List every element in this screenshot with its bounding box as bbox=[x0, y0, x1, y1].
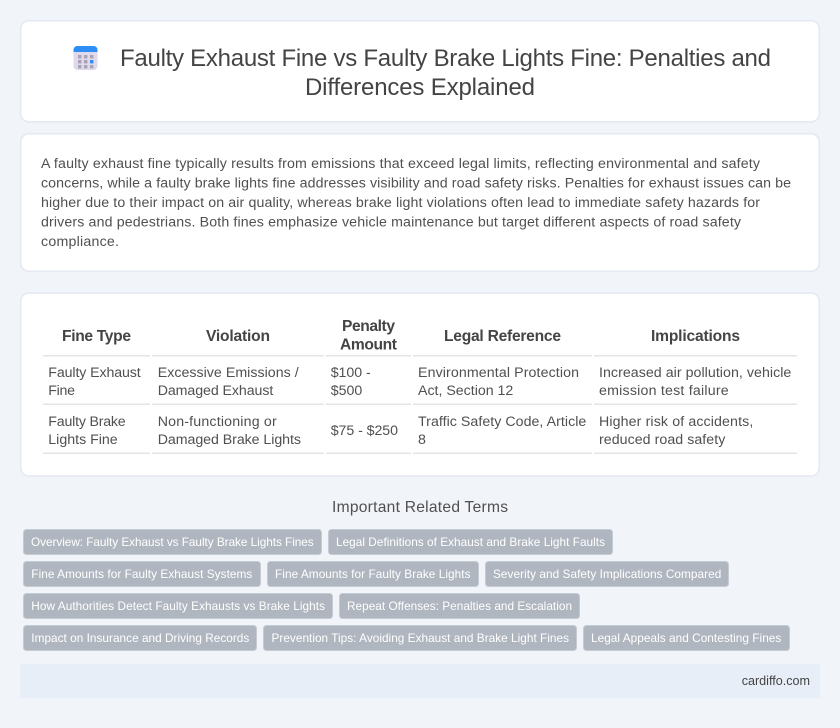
heading: related terms: Important Related Terms bbox=[332, 499, 508, 516]
tag: appeals: Legal Appeals and Contesting Fines bbox=[591, 631, 781, 645]
tag: insurance bbox=[24, 626, 256, 650]
title bbox=[120, 45, 771, 101]
tag: detection bbox=[24, 594, 332, 618]
table row: faulty exhaust fine bbox=[48, 365, 791, 399]
table header row: Legal Reference bbox=[444, 328, 561, 345]
table header row: Implications bbox=[651, 328, 740, 345]
tag: prevention: Prevention Tips: Avoiding Exhaust and Brake Light Fines bbox=[272, 631, 569, 645]
tag: brake light fine amounts: Fine Amounts for Faulty Brake Lights bbox=[275, 567, 471, 581]
table header row bbox=[62, 318, 740, 354]
title: Faulty Exhaust Fine vs Faulty Brake Lights Fine: Penalties and bbox=[120, 45, 771, 72]
text block: summary: higher due to their impact on air quality, whereas brake light violations often lead to immediate safety hazards for bbox=[41, 195, 760, 211]
table row: faulty exhaust fine: $100 - bbox=[331, 365, 371, 381]
table row: faulty exhaust fine: Environmental Protection bbox=[418, 365, 579, 381]
title: Differences Explained bbox=[305, 74, 535, 101]
table header row: Fine Type bbox=[62, 328, 131, 345]
table header row: Violation bbox=[206, 328, 270, 345]
tag: insurance: Impact on Insurance and Driving Records bbox=[31, 631, 249, 645]
tag: repeat offenses bbox=[340, 594, 580, 618]
tag: overview: Overview: Faulty Exhaust vs Faulty Brake Lights Fines bbox=[31, 535, 314, 549]
tag: repeat offenses: Repeat Offenses: Penalties and Escalation bbox=[347, 599, 572, 613]
text block: summary: drivers and pedestrians. Both fines emphasize vehicle maintenance but target different aspects of road safety bbox=[41, 214, 742, 230]
text block: summary: A faulty exhaust fine typically results from emissions that exceed legal limits, reflecting environmental and safety bbox=[41, 156, 761, 172]
text block: summary bbox=[41, 156, 791, 250]
panel: comparison table bbox=[21, 293, 819, 476]
tag: legal definitions: Legal Definitions of Exhaust and Brake Light Faults bbox=[336, 535, 605, 549]
icon: calendar bbox=[74, 46, 98, 70]
tag: severity: Severity and Safety Implications Compared bbox=[493, 567, 721, 581]
table row: faulty exhaust fine: Damaged Exhaust bbox=[158, 383, 273, 399]
table row: faulty exhaust fine: Increased air pollution, vehicle bbox=[599, 365, 791, 381]
tag: brake light fine amounts bbox=[268, 562, 478, 586]
panel: summary paragraph bbox=[21, 134, 819, 271]
table row: faulty brake lights fine: Damaged Brake Lights bbox=[158, 432, 301, 448]
table row: faulty brake lights fine: Traffic Safety Code, Article bbox=[418, 414, 586, 430]
footer: cardiffo.com bbox=[742, 674, 810, 688]
tag: overview bbox=[24, 530, 322, 554]
footer bbox=[20, 664, 820, 698]
text block: summary: concerns, while a faulty brake lights fine addresses visibility and road safety risks. Penalties for exhaust issues can be bbox=[41, 176, 791, 192]
table row: faulty exhaust fine: Fine bbox=[48, 383, 75, 399]
table row: faulty brake lights fine: reduced road safety bbox=[599, 432, 726, 448]
text block: summary: compliance. bbox=[41, 234, 119, 250]
table row: faulty brake lights fine: 8 bbox=[418, 432, 426, 448]
tag: prevention bbox=[264, 626, 576, 650]
table row: faulty brake lights fine bbox=[48, 414, 753, 448]
tag: appeals bbox=[584, 626, 790, 650]
table row: faulty brake lights fine: Faulty Brake bbox=[48, 414, 126, 430]
table row: faulty exhaust fine: Act, Section 12 bbox=[418, 383, 513, 399]
table row: faulty brake lights fine: Non-functioning or bbox=[158, 414, 277, 430]
table row: faulty brake lights fine: Lights Fine bbox=[48, 432, 118, 448]
table row: faulty exhaust fine: emission test failure bbox=[599, 383, 729, 399]
table row: faulty exhaust fine: Excessive Emissions / bbox=[158, 365, 299, 381]
tag: exhaust fine amounts: Fine Amounts for Faulty Exhaust Systems bbox=[31, 567, 252, 581]
table row: faulty brake lights fine: $75 - $250 bbox=[331, 423, 398, 439]
tag: severity bbox=[486, 562, 728, 586]
tag: detection: How Authorities Detect Faulty Exhausts vs Brake Lights bbox=[31, 599, 325, 613]
tag: exhaust fine amounts bbox=[24, 562, 260, 586]
table row: faulty exhaust fine: $500 bbox=[331, 383, 362, 399]
table header row: Penalty bbox=[342, 318, 395, 335]
table header row: Amount bbox=[340, 336, 397, 354]
tag list: related terms bbox=[24, 530, 790, 650]
tag: legal definitions bbox=[328, 530, 612, 554]
table row: faulty brake lights fine: Higher risk of accidents, bbox=[599, 414, 753, 430]
table row: faulty exhaust fine: Faulty Exhaust bbox=[48, 365, 141, 381]
panel: header bbox=[21, 21, 819, 122]
